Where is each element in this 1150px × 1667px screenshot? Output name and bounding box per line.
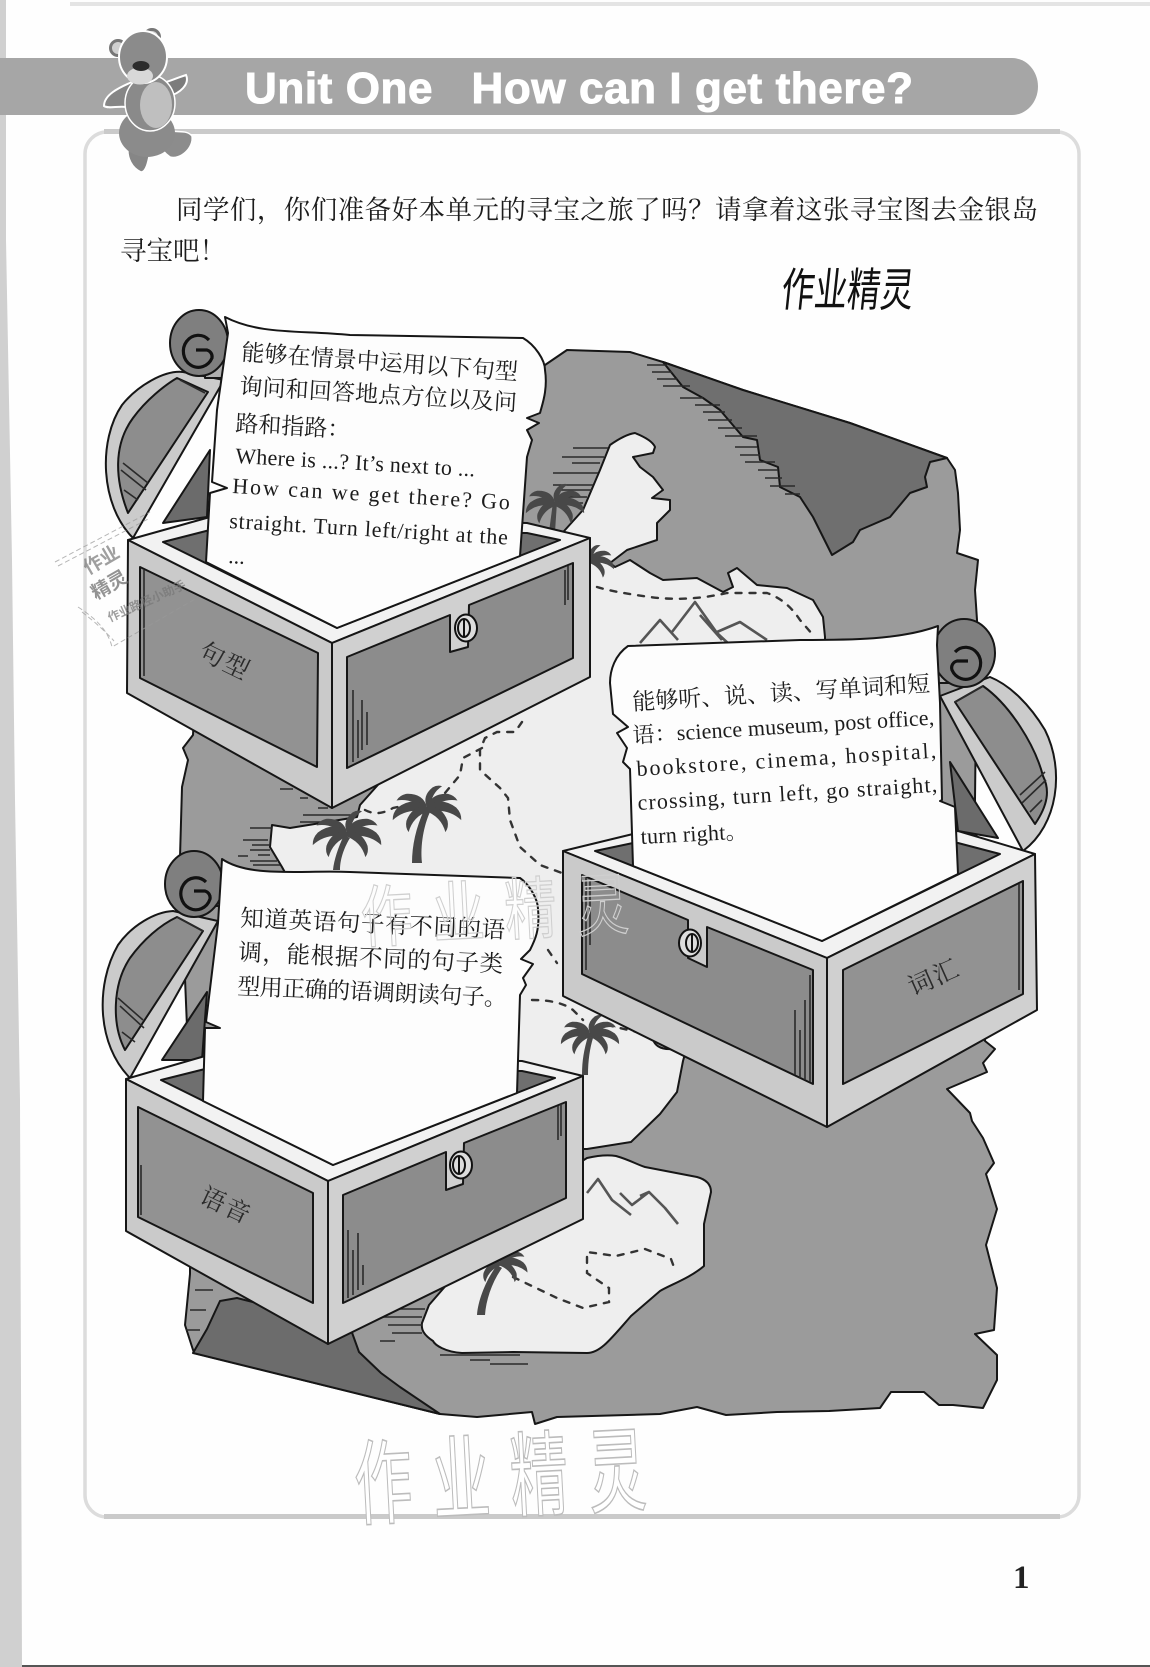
palm tree: behind first chest (566, 544, 614, 578)
scroll paper (203, 859, 538, 1165)
chest: phonics (103, 851, 583, 1344)
scroll text (228, 340, 519, 569)
open rim (126, 1056, 583, 1181)
scroll text (237, 905, 508, 1011)
watermark at bottom: 作业精灵 (350, 1396, 649, 1546)
lid (940, 677, 1056, 851)
scroll text: Where is ...? It’s next to ... (235, 443, 476, 481)
scroll text: straight. Turn left/right at the (229, 508, 509, 550)
right panel (843, 881, 1023, 1084)
page number: 1 (1013, 1560, 1030, 1596)
scroll text: crossing, turn left, go straight, (637, 772, 938, 815)
palm tree: lower island (472, 1243, 528, 1315)
hatching (186, 365, 800, 1364)
stamp watermark (55, 512, 197, 647)
bear mascot (104, 30, 192, 172)
intro text (120, 195, 1038, 266)
small gray bump (652, 1030, 690, 1049)
chest: sentence patterns (106, 310, 590, 808)
open rim (563, 831, 1035, 958)
stamp watermark: 精灵 (86, 563, 132, 605)
scratches (144, 566, 568, 762)
scroll text: 型用正确的语调朗读句子。 (237, 974, 508, 1011)
left panel with latch notch (582, 875, 813, 1084)
banner title: Unit One How can I get there? (245, 64, 913, 113)
palm tree: tall (393, 784, 461, 863)
stamp watermark: 作业路径小助手 (105, 576, 188, 626)
chest label: 句型 (194, 637, 253, 685)
scratches (586, 878, 1019, 1082)
right panel with latch notch (347, 563, 573, 768)
right panel with latch notch (343, 1102, 566, 1303)
scratches (141, 1104, 561, 1298)
banner (0, 58, 1038, 115)
scroll text: 路和指路： (235, 411, 351, 442)
map sheet (180, 350, 997, 1424)
lid (106, 372, 224, 538)
scroll text: turn right。 (640, 818, 748, 849)
chest label: 语音 (195, 1182, 254, 1229)
mountains (587, 602, 767, 1224)
scroll text: bookstore, cinema, hospital, (636, 738, 937, 781)
scroll text: 询问和回答地点方位以及问 (239, 374, 518, 415)
chest: vocabulary (563, 619, 1056, 1127)
left panel (140, 567, 318, 767)
scroll paper (206, 317, 546, 628)
lower island (422, 1155, 711, 1353)
open rim (128, 517, 590, 643)
scroll text: ... (228, 543, 246, 569)
palm tree: right (561, 1013, 619, 1075)
intro text: 同学们，你们准备好本单元的寻宝之旅了吗？请拿着这张寻宝图去金银岛 (176, 195, 1038, 225)
scroll text (632, 671, 938, 849)
scroll text: 知道英语句子有不同的语 (240, 905, 506, 944)
scroll roll (933, 619, 995, 687)
scroll roll (170, 310, 229, 378)
chest label: 词汇 (904, 955, 963, 1001)
scroll text: 调，能根据不同的句子类 (238, 939, 504, 978)
lid (103, 911, 218, 1078)
latch ring (455, 614, 477, 642)
scroll text: How can we get there? Go (232, 473, 511, 514)
handwritten signature: 作业精灵 (779, 254, 917, 320)
scroll text: 语：science museum, post office, (632, 705, 935, 748)
intro text: 寻宝吧！ (120, 236, 226, 266)
stamp watermark: 作业 (78, 538, 124, 580)
latch ring (450, 1152, 472, 1178)
scroll roll (165, 851, 227, 917)
scroll text: 能够在情景中运用以下句型 (241, 340, 519, 385)
scroll paper (610, 626, 958, 941)
treasure map (180, 350, 997, 1424)
left panel (138, 1107, 313, 1303)
front faces (126, 1076, 583, 1344)
scroll text: 能够听、说、读、写单词和短 (632, 671, 931, 715)
front faces (127, 538, 590, 808)
palm tree: top (526, 482, 584, 532)
upper island (270, 433, 825, 1149)
content panel (85, 129, 1079, 1519)
treasure paths (365, 587, 813, 1308)
front faces (563, 851, 1037, 1127)
top folded corner (663, 362, 947, 555)
watermark on paper: 作业精灵 (358, 851, 631, 962)
palm tree: left (313, 809, 381, 870)
latch ring (679, 930, 701, 956)
bottom folded corner (193, 1298, 440, 1414)
